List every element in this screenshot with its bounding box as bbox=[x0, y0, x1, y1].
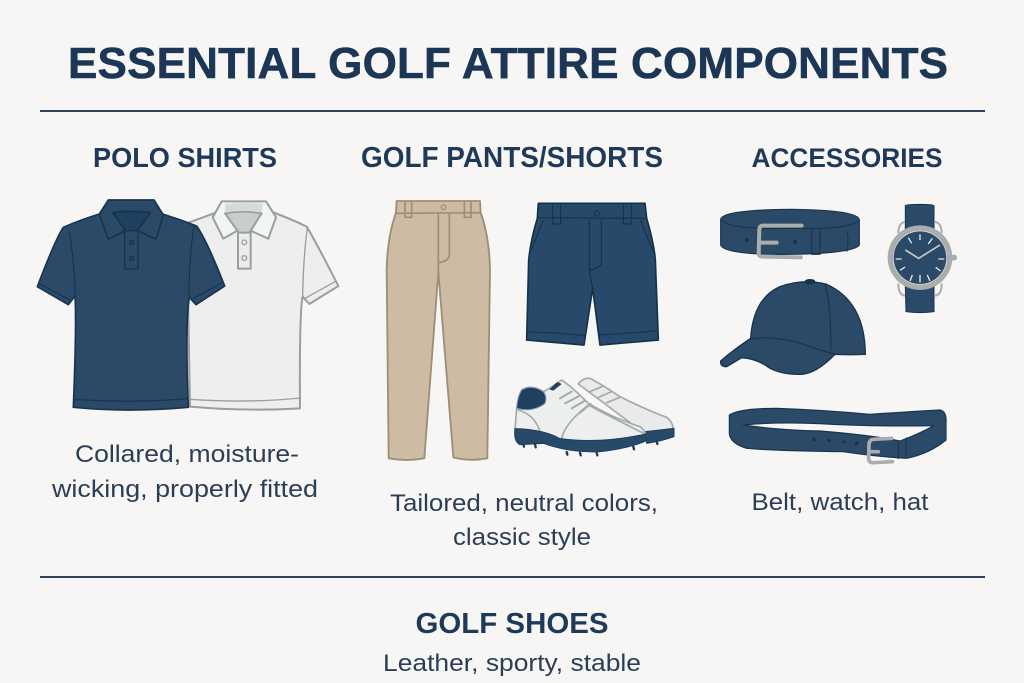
panel: accessories bbox=[721, 143, 957, 516]
heading: polo shirts: POLO SHIRTS bbox=[93, 142, 277, 173]
icon: khaki pants bbox=[387, 201, 490, 460]
text: pants description: classic style bbox=[453, 524, 591, 551]
icon: navy polo shirt bbox=[37, 200, 225, 410]
icon: white polo shirt bbox=[187, 201, 338, 410]
heading: golf shoes: GOLF SHOES bbox=[416, 608, 608, 640]
icons: pants and shorts bbox=[387, 201, 658, 460]
icons: polo shirts bbox=[37, 200, 338, 410]
text: accessories description: Belt, watch, hat bbox=[752, 489, 929, 516]
heading: golf pants/shorts: GOLF PANTS/SHORTS bbox=[361, 142, 663, 174]
text: pants description: Tailored, neutral colors, bbox=[390, 490, 658, 517]
icon: golf shoes bbox=[515, 378, 674, 455]
icon: wristwatch bbox=[888, 204, 957, 313]
text: golf shoes description: Leather, sporty, stable bbox=[383, 650, 641, 677]
panel: golf shoes bbox=[383, 608, 641, 677]
icon: golf cap bbox=[721, 280, 865, 374]
icons: accessories bbox=[721, 204, 957, 463]
icon: navy shorts bbox=[527, 203, 658, 345]
heading: accessories: ACCESSORIES bbox=[752, 143, 942, 173]
title: ESSENTIAL GOLF ATTIRE COMPONENTS bbox=[68, 39, 948, 88]
icon: long belt bbox=[729, 408, 946, 463]
text: polo shirts description: Collared, moisture- bbox=[75, 441, 299, 468]
text: polo shirts description: wicking, properly fitted bbox=[51, 476, 318, 503]
icon: coiled belt bbox=[721, 209, 859, 257]
panel: golf pants and shorts bbox=[361, 142, 674, 551]
panel: polo shirts bbox=[37, 142, 338, 503]
